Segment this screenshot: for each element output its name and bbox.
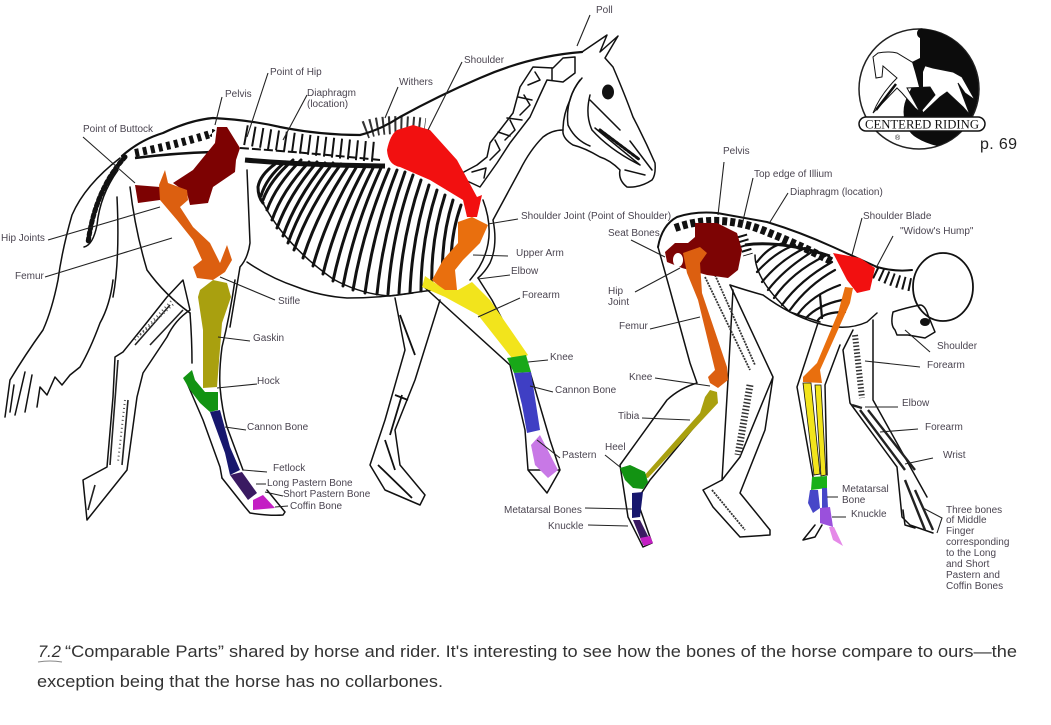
logo rider: [912, 28, 927, 87]
rider heel: [620, 465, 648, 489]
rider skull: [913, 253, 973, 321]
horse hock: [183, 370, 218, 412]
logo registered mark: ®: [895, 134, 901, 142]
rider femur: [683, 247, 728, 388]
rider labels: Shoulder: [937, 341, 978, 352]
rider hand metacarpals: [808, 488, 828, 513]
rider labels: corresponding: [946, 537, 1009, 548]
rider far hand: [803, 510, 915, 540]
rider skeleton diagram: [620, 212, 973, 547]
horse labels: Cannon Bone: [555, 385, 617, 396]
rider labels: Wrist: [943, 450, 966, 461]
horse far hind leg bones: [88, 305, 183, 510]
rider tibia: [643, 390, 718, 478]
rider labels: Tibia: [618, 411, 640, 422]
horse front cannon: [514, 372, 540, 433]
rider labels: Pastern and: [946, 570, 1000, 581]
horse labels: Point of Hip: [270, 67, 322, 78]
chest arc: [470, 200, 489, 280]
horse neck vertebrae: [462, 57, 575, 187]
horse shoulder blade: [387, 125, 482, 217]
rider labels: Finger: [946, 526, 975, 537]
leader lines: [45, 15, 942, 533]
rider arm hatch: [855, 335, 862, 398]
rider labels: Diaphragm (location): [790, 187, 883, 198]
caption: 7.2: [38, 643, 61, 661]
horse labels: Stifle: [278, 296, 301, 307]
rider forearm bones: [803, 383, 826, 476]
rider labels: Femur: [619, 321, 649, 332]
rider eye: [920, 318, 930, 326]
horse labels: Withers: [399, 77, 433, 88]
rider spine: [675, 221, 912, 285]
rider wrist: [811, 476, 827, 490]
horse ribcage: [258, 160, 461, 294]
rider fingertip: [829, 527, 843, 546]
horse skeleton diagram: [5, 35, 655, 520]
rider labels: "Widow's Hump": [900, 226, 974, 237]
logo horse: [873, 52, 975, 115]
horse labels: Forearm: [522, 290, 560, 301]
rider hip hole: [673, 253, 683, 267]
horse labels: Pelvis: [225, 89, 252, 100]
horse labels: Shoulder Joint (Point of Shoulder): [521, 211, 671, 222]
horse labels: Short Pastern Bone: [283, 489, 371, 500]
horse labels: Upper Arm: [516, 248, 564, 259]
rider shin hatch: [738, 385, 750, 455]
horse body outline: [113, 35, 655, 515]
horse gaskin: [198, 280, 231, 388]
rider labels: Knuckle: [548, 521, 584, 532]
horse upper arm: [432, 217, 488, 293]
horse front far leg: [370, 298, 440, 505]
horse labels: Long Pastern Bone: [267, 478, 353, 489]
rider labels: Three bones: [946, 505, 1002, 516]
rider labels: Knee: [629, 372, 653, 383]
rider toes: [633, 520, 650, 545]
rider ribcage outer: [755, 255, 820, 322]
rider labels: Metatarsal: [842, 484, 889, 495]
horse labels: Cannon Bone: [247, 422, 309, 433]
rider labels: Heel: [605, 442, 626, 453]
horse spine: [135, 125, 425, 166]
horse far hind leg: [83, 280, 190, 520]
horse far hind leg stipple: [118, 300, 178, 462]
rider labels: Hip: [608, 286, 623, 297]
rider labels: Metatarsal Bones: [504, 505, 582, 516]
horse tail: [5, 157, 125, 417]
rider labels: Bone: [842, 495, 866, 506]
rider labels: Knuckle: [851, 509, 887, 520]
rider ribcage: [757, 243, 845, 320]
horse labels: [1, 5, 671, 512]
horse coffin bone: [253, 495, 275, 510]
page number: p. 69: [980, 136, 1017, 153]
centered riding logo: [859, 28, 985, 149]
rider shoulder blade: [833, 253, 875, 293]
horse skull details: [568, 80, 652, 175]
horse labels: Femur: [15, 271, 45, 282]
horse labels: Diaphragm: [307, 88, 356, 99]
logo yin-yang black area: [904, 29, 978, 146]
rider toe tip: [640, 536, 653, 546]
rider labels: of Middle: [946, 515, 987, 526]
rider labels: Joint: [608, 297, 629, 308]
horse labels: (location): [307, 99, 348, 110]
logo foreleg shadow: [876, 84, 896, 110]
caption: exception being that the horse has no collarbones.: [37, 673, 443, 691]
rider labels: Forearm: [927, 360, 965, 371]
rider labels: to the Long: [946, 548, 996, 559]
horse pelvis: [135, 127, 240, 205]
horse long pastern bone: [230, 472, 257, 500]
horse near foreleg outline: [422, 278, 560, 493]
horse labels: Shoulder: [464, 55, 505, 66]
rider leg hatch: [705, 275, 755, 530]
horse femur: [159, 170, 232, 280]
rider labels: Elbow: [902, 398, 930, 409]
horse forearm: [422, 276, 528, 362]
rider metatarsal: [632, 492, 643, 518]
logo ribbon: CENTERED RIDING: [865, 118, 979, 132]
rider face: [892, 305, 935, 338]
rider arm bones: [852, 405, 933, 530]
horse labels: Gaskin: [253, 333, 284, 344]
horse labels: Knee: [550, 352, 574, 363]
rider finger bone: [820, 507, 833, 527]
rider labels: and Short: [946, 559, 990, 570]
horse labels: Point of Buttock: [83, 124, 154, 135]
logo disc: [859, 29, 979, 149]
rider pelvis: [665, 223, 742, 278]
horse pastern: [531, 435, 558, 478]
horse cannon bone: [210, 410, 240, 475]
horse labels: Hock: [257, 376, 281, 387]
rider labels: Pelvis: [723, 146, 750, 157]
horse knee: [507, 355, 531, 373]
rider body outline: [620, 212, 933, 547]
horse labels: Coffin Bone: [290, 501, 343, 512]
rider upper arm: [803, 287, 853, 383]
horse labels: Pastern: [562, 450, 596, 461]
rider labels: Forearm: [925, 422, 963, 433]
rider labels: Coffin Bones: [946, 581, 1003, 592]
horse front far leg bones: [378, 315, 415, 498]
rider labels: Top edge of Illium: [754, 169, 832, 180]
rider labels: Shoulder Blade: [863, 211, 932, 222]
horse ribcage lower edge: [263, 203, 440, 296]
rider labels: [504, 146, 1009, 592]
horse labels: Elbow: [511, 266, 539, 277]
horse labels: Fetlock: [273, 463, 306, 474]
horse labels: Hip Joints: [1, 233, 45, 244]
rider labels: Seat Bones: [608, 228, 660, 239]
horse labels: Poll: [596, 5, 613, 16]
caption: [37, 643, 1017, 691]
caption: “Comparable Parts” shared by horse and rider. It's interesting to see how the bones of the horse compare to ours—the: [65, 643, 1017, 661]
